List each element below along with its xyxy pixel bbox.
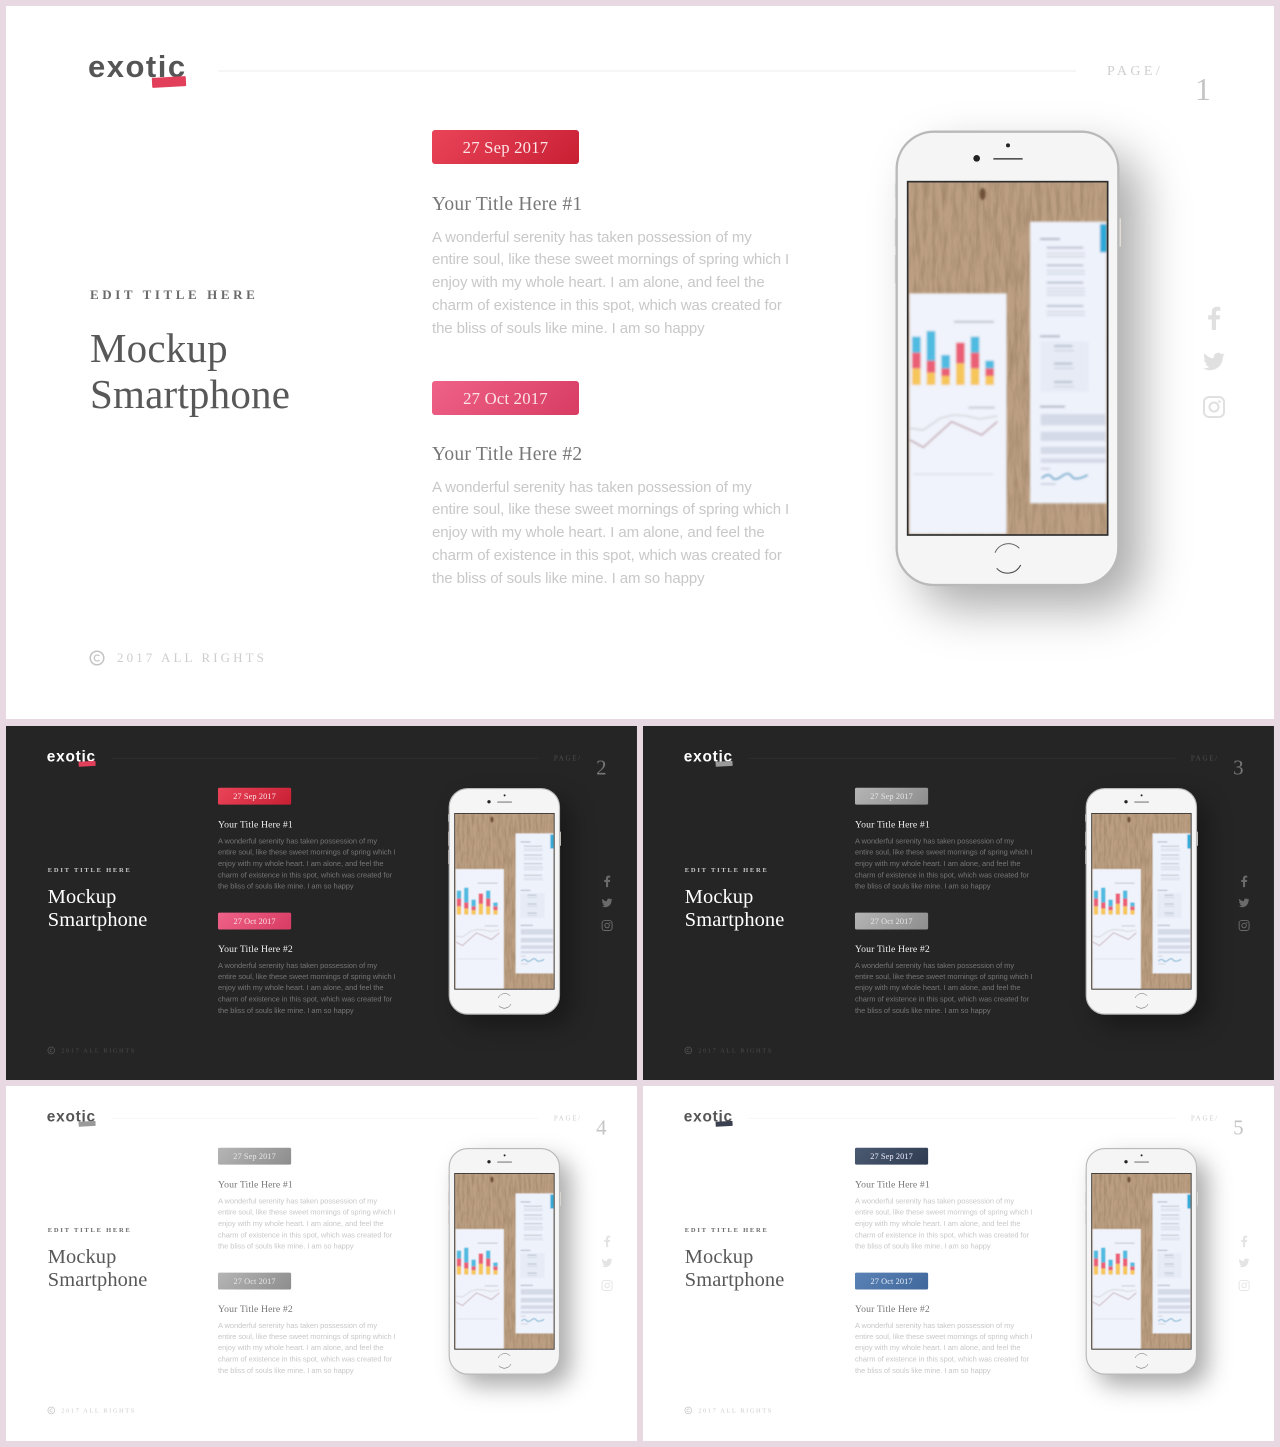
- title: Smartphone: [90, 370, 290, 416]
- text block 1: A wonderful serenity has taken possession of my: [218, 1197, 377, 1205]
- text block 2: A wonderful serenity has taken possession of my: [855, 961, 1014, 970]
- icon: instagram: [602, 920, 613, 931]
- page label: PAGE/: [1191, 755, 1219, 762]
- date badge 1: [218, 788, 291, 805]
- date badge 1: [855, 788, 928, 805]
- text block 1: enjoy with my whole heart. I am alone, and feel the: [218, 859, 383, 868]
- text block 1: the bliss of souls like mine. I am so happy: [432, 320, 704, 337]
- eyebrow heading: EDIT TITLE HERE: [90, 287, 258, 302]
- icon: facebook: [604, 876, 610, 888]
- text block 2: entire soul, like these sweet mornings of spring which I: [218, 972, 396, 981]
- text block 1: A wonderful serenity has taken possession of my: [432, 228, 752, 246]
- logo: exotic: exotic: [684, 747, 733, 765]
- phone mockup: [448, 788, 561, 1015]
- text block 1: enjoy with my whole heart. I am alone, and feel the: [855, 859, 1020, 868]
- item title 1: Your Title Here #1: [855, 1180, 930, 1190]
- text block 1: A wonderful serenity has taken possession of my: [855, 837, 1014, 845]
- icon: twitter: [602, 898, 612, 908]
- title: Smartphone: [48, 907, 147, 930]
- icon: facebook: [604, 1236, 610, 1247]
- date badge 2: 27 Oct 2017: [870, 1276, 913, 1286]
- text block 1: A wonderful serenity has taken possession of my: [218, 837, 377, 845]
- text block 2: [855, 1320, 1033, 1377]
- icon: facebook: [1238, 1235, 1250, 1247]
- title: Smartphone: [48, 1267, 147, 1290]
- icon: facebook: [1241, 876, 1248, 888]
- text block 2: charm of existence in this spot, which was created for: [855, 995, 1029, 1004]
- page number: 4: [596, 1116, 607, 1139]
- title: Smartphone: [685, 907, 784, 930]
- logo: exotic: exotic: [88, 49, 187, 84]
- text block 2: [218, 1321, 396, 1375]
- text block 2: charm of existence in this spot, which was created for: [432, 547, 782, 564]
- date badge 2: 27 Oct 2017: [233, 1276, 276, 1286]
- logo: exotic: exotic: [684, 1107, 733, 1125]
- date badge 2: [218, 1272, 291, 1289]
- title: Mockup: [685, 1245, 753, 1268]
- text block 1: entire soul, like these sweet mornings of spring which I: [855, 1208, 1033, 1217]
- text block 1: charm of existence in this spot, which was created for: [855, 1231, 1029, 1239]
- text block 2: the bliss of souls like mine. I am so happy: [218, 1006, 354, 1015]
- text block 1: the bliss of souls like mine. I am so happy: [218, 1242, 354, 1251]
- title: [685, 885, 784, 930]
- text block 1: enjoy with my whole heart. I am alone, and feel the: [432, 274, 765, 291]
- copyright: 2017 ALL RIGHTS: [698, 1406, 773, 1414]
- date badge 2: [218, 912, 291, 929]
- text block 2: charm of existence in this spot, which was created for: [855, 1355, 1029, 1364]
- title: Mockup: [90, 325, 228, 371]
- icon: instagram: [602, 1280, 612, 1291]
- icon: instagram: [1238, 1280, 1250, 1292]
- text block 2: [855, 961, 1033, 1015]
- text block 2: enjoy with my whole heart. I am alone, and feel the: [218, 1344, 383, 1352]
- date badge 1: [218, 1148, 291, 1165]
- title: [48, 885, 147, 930]
- text block 2: entire soul, like these sweet mornings of spring which I: [855, 1332, 1033, 1341]
- page label: PAGE/: [1191, 1115, 1219, 1122]
- text block 2: entire soul, like these sweet mornings of spring which I: [855, 972, 1033, 981]
- copyright: 2017 ALL RIGHTS: [117, 650, 267, 665]
- text block 2: charm of existence in this spot, which was created for: [218, 1355, 392, 1364]
- date badge 1: [855, 1148, 928, 1165]
- item title 1: Your Title Here #1: [218, 820, 293, 830]
- text block 1: A wonderful serenity has taken possession of my: [855, 1197, 1014, 1205]
- item title 1: Your Title Here #1: [218, 1180, 293, 1190]
- text block 1: [855, 1196, 1033, 1252]
- text block 1: the bliss of souls like mine. I am so happy: [218, 882, 354, 891]
- page number: 3: [1233, 756, 1244, 779]
- date badge 2: [432, 380, 579, 414]
- text block 2: A wonderful serenity has taken possession of my: [432, 478, 752, 496]
- date badge 2: 27 Oct 2017: [870, 916, 913, 926]
- date badge 2: [855, 1272, 928, 1289]
- title: Mockup: [48, 1245, 116, 1268]
- item title 2: Your Title Here #2: [218, 1304, 293, 1314]
- page label: PAGE/: [554, 755, 582, 762]
- text block 1: charm of existence in this spot, which was created for: [218, 1231, 392, 1239]
- text block 2: enjoy with my whole heart. I am alone, and feel the: [855, 984, 1020, 992]
- phone mockup: [448, 1148, 561, 1375]
- text block 2: the bliss of souls like mine. I am so happy: [855, 1366, 991, 1375]
- text block 2: entire soul, like these sweet mornings of spring which I: [432, 501, 789, 518]
- text block 1: the bliss of souls like mine. I am so happy: [855, 882, 991, 891]
- item title 2: Your Title Here #2: [432, 444, 582, 465]
- eyebrow heading: EDIT TITLE HERE: [48, 1226, 132, 1233]
- text block 2: enjoy with my whole heart. I am alone, and feel the: [855, 1344, 1020, 1352]
- page label: PAGE/: [554, 1115, 582, 1122]
- text block 1: charm of existence in this spot, which was created for: [432, 297, 782, 314]
- eyebrow heading: EDIT TITLE HERE: [685, 866, 769, 873]
- panel: main slide 1: [6, 6, 1274, 719]
- date badge 1: 27 Sep 2017: [233, 792, 276, 801]
- text block 1: entire soul, like these sweet mornings of spring which I: [218, 848, 396, 857]
- phone mockup: [894, 130, 1121, 586]
- item title 2: Your Title Here #2: [855, 1304, 930, 1314]
- text block 1: [855, 837, 1033, 891]
- text block 1: enjoy with my whole heart. I am alone, and feel the: [218, 1219, 383, 1228]
- item title 2: Your Title Here #2: [855, 944, 930, 954]
- copyright: 2017 ALL RIGHTS: [61, 1046, 136, 1054]
- text block 1: entire soul, like these sweet mornings of spring which I: [218, 1208, 396, 1217]
- logo: exotic: exotic: [47, 1107, 96, 1125]
- text block 1: entire soul, like these sweet mornings of spring which I: [855, 848, 1033, 857]
- title: Smartphone: [685, 1267, 784, 1290]
- text block 2: charm of existence in this spot, which was created for: [218, 995, 392, 1004]
- text block 2: [432, 478, 789, 587]
- copyright: [684, 1405, 774, 1415]
- item title 1: Your Title Here #1: [855, 820, 930, 830]
- eyebrow heading: EDIT TITLE HERE: [685, 1226, 769, 1233]
- text block 1: charm of existence in this spot, which was created for: [218, 871, 392, 879]
- text block 1: charm of existence in this spot, which was created for: [855, 871, 1029, 879]
- title: [48, 1245, 147, 1290]
- text block 1: the bliss of souls like mine. I am so happy: [855, 1242, 991, 1251]
- icon: twitter: [1239, 898, 1250, 908]
- text block 2: the bliss of souls like mine. I am so happy: [218, 1366, 354, 1375]
- page number: 1: [1195, 71, 1211, 107]
- panel: dark gray slide 3: [643, 726, 1274, 1080]
- copyright: 2017 ALL RIGHTS: [698, 1046, 773, 1054]
- text block 2: [218, 961, 396, 1015]
- icon: facebook: [1208, 306, 1220, 330]
- copyright: 2017 ALL RIGHTS: [61, 1406, 136, 1414]
- date badge 1: [432, 130, 579, 164]
- date badge 2: 27 Oct 2017: [463, 388, 548, 408]
- icon: twitter: [1204, 352, 1224, 370]
- phone mockup: [1085, 788, 1198, 1015]
- text block 2: the bliss of souls like mine. I am so happy: [855, 1006, 991, 1015]
- title: Mockup: [685, 885, 753, 908]
- date badge 1: 27 Sep 2017: [233, 1152, 276, 1161]
- text block 1: [218, 1197, 396, 1251]
- logo: exotic: exotic: [47, 747, 96, 765]
- page number: 5: [1233, 1116, 1244, 1139]
- text block 2: enjoy with my whole heart. I am alone, and feel the: [218, 984, 383, 992]
- eyebrow heading: EDIT TITLE HERE: [48, 866, 132, 873]
- text block 2: A wonderful serenity has taken possession of my: [218, 961, 377, 970]
- item title 2: Your Title Here #2: [218, 944, 293, 954]
- text block 1: [218, 837, 396, 891]
- text block 1: enjoy with my whole heart. I am alone, and feel the: [855, 1219, 1020, 1228]
- panel: light gray slide 4: [6, 1086, 637, 1441]
- panel: dark slide 2: [6, 726, 637, 1080]
- item title 1: Your Title Here #1: [432, 194, 582, 215]
- page label: PAGE/: [1107, 64, 1163, 79]
- date badge 1: 27 Sep 2017: [870, 1152, 913, 1161]
- text block 1: [432, 228, 789, 337]
- page number: 2: [596, 756, 607, 779]
- phone mockup: [1078, 1143, 1207, 1382]
- icon: instagram: [1238, 920, 1250, 931]
- text block 1: entire soul, like these sweet mornings of spring which I: [432, 251, 789, 268]
- panel: light navy slide 5: [643, 1086, 1274, 1441]
- title: [90, 325, 290, 417]
- text block 2: A wonderful serenity has taken possession of my: [218, 1321, 377, 1330]
- text block 2: entire soul, like these sweet mornings of spring which I: [218, 1332, 396, 1341]
- text block 2: enjoy with my whole heart. I am alone, and feel the: [432, 524, 765, 541]
- icon: twitter: [1238, 1257, 1250, 1269]
- text block 2: A wonderful serenity has taken possession of my: [855, 1321, 1014, 1330]
- icon: instagram: [1203, 396, 1225, 418]
- icon: twitter: [602, 1258, 612, 1268]
- date badge 2: 27 Oct 2017: [233, 916, 276, 926]
- text block 2: the bliss of souls like mine. I am so happy: [432, 570, 704, 587]
- date badge 1: 27 Sep 2017: [463, 138, 548, 157]
- date badge 1: 27 Sep 2017: [870, 792, 913, 801]
- title: [685, 1245, 784, 1291]
- date badge 2: [855, 912, 928, 929]
- title: Mockup: [48, 885, 116, 908]
